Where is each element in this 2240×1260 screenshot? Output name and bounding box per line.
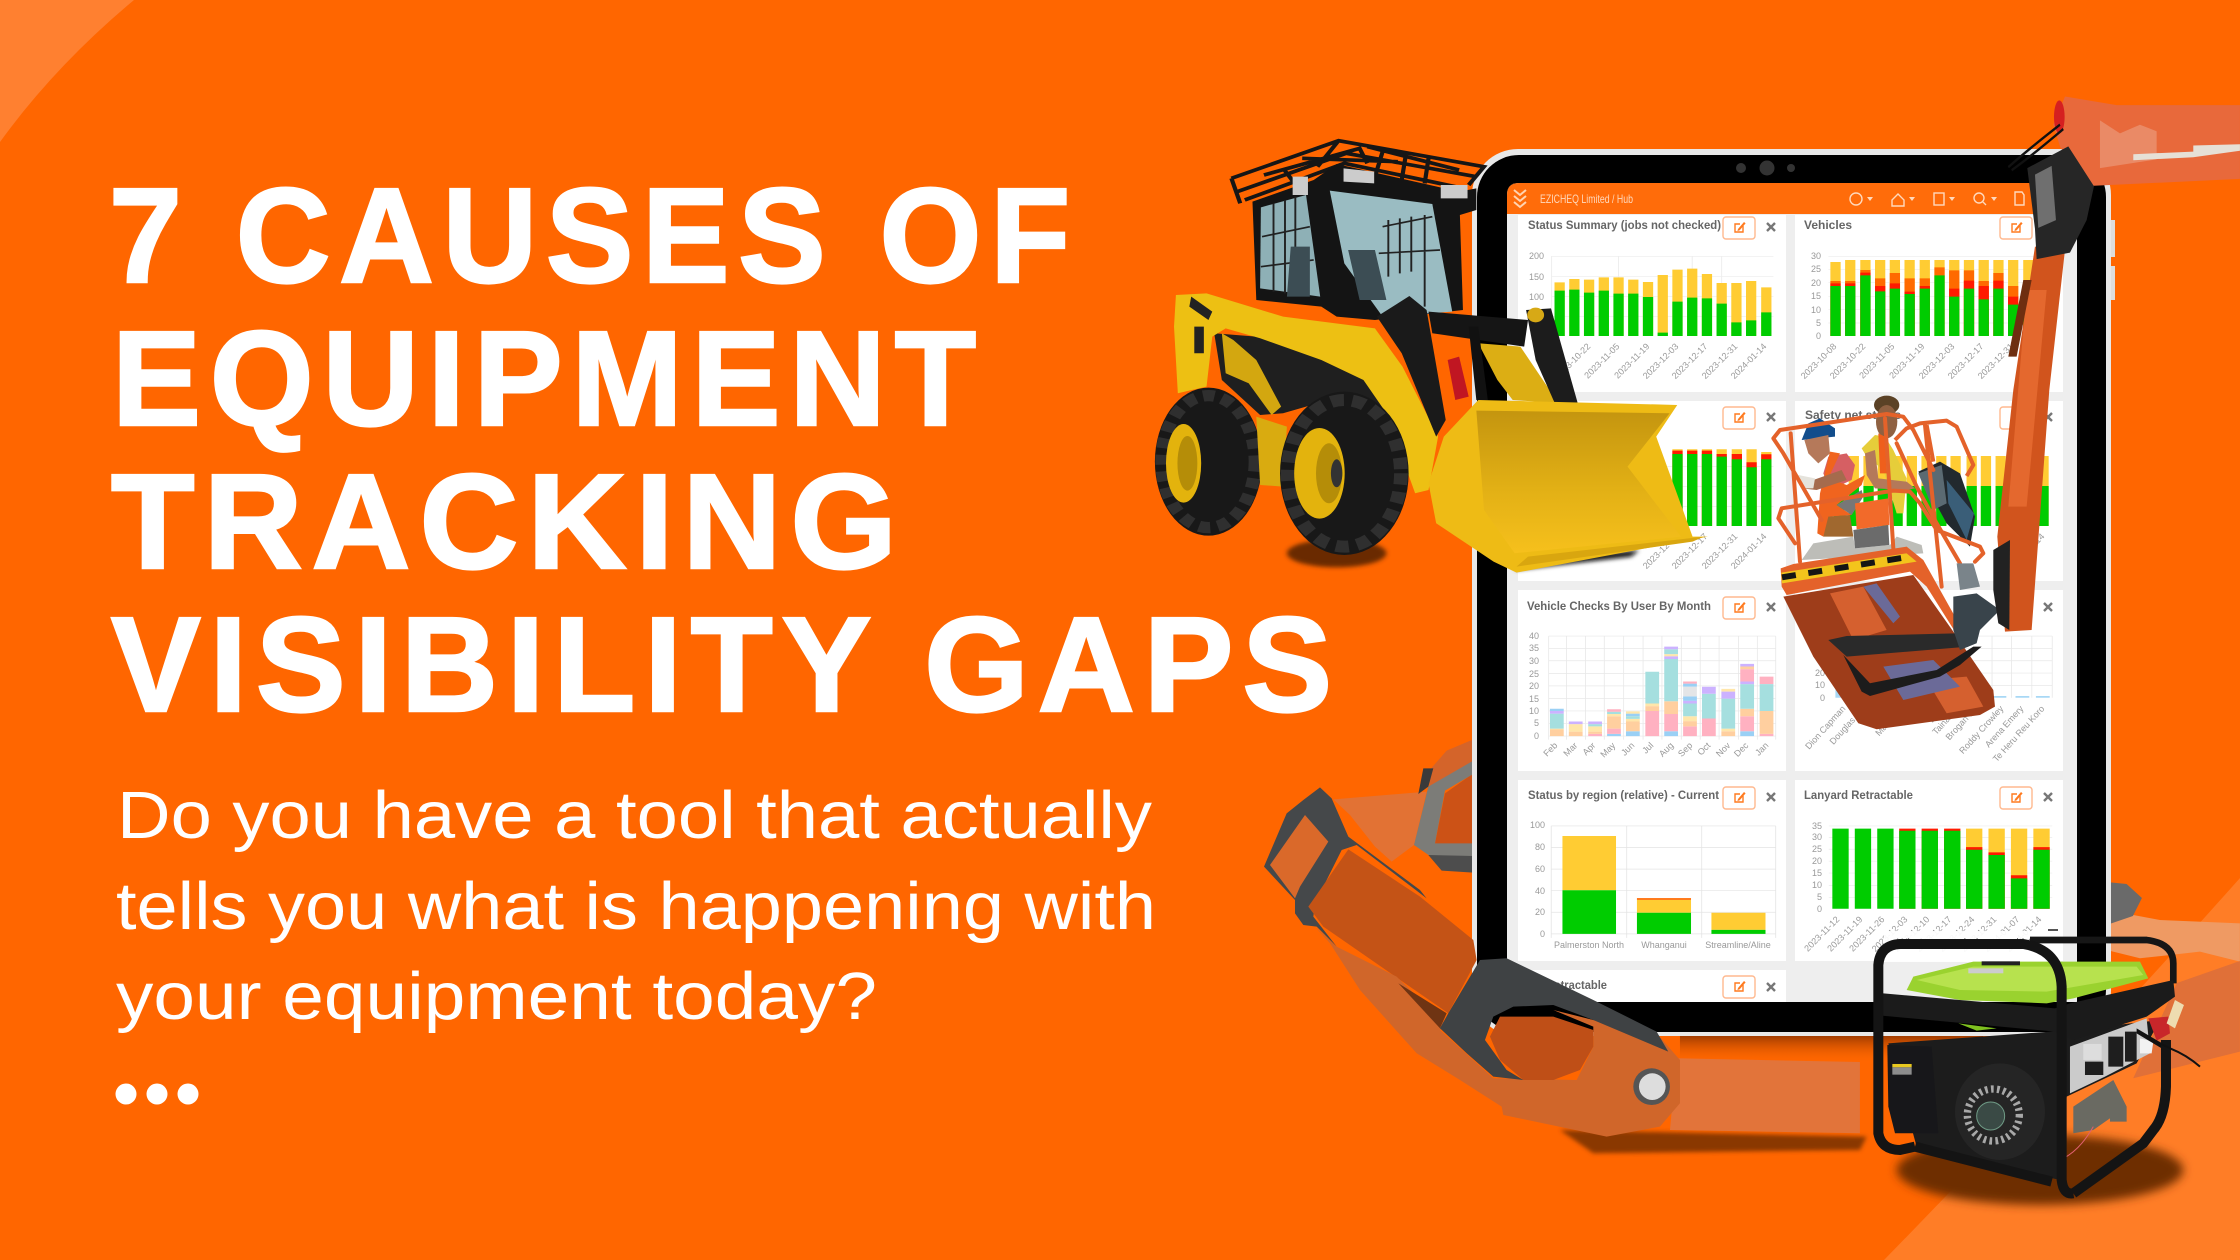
title: 7 CAUSES OF	[109, 160, 1079, 311]
bar chart: status summary: 2023-12-17	[1670, 341, 1709, 381]
tablet cameras	[1736, 160, 1795, 176]
card: status summary: Status Summary (jobs not checked)	[1528, 218, 1721, 232]
bar chart: checks by user: Roddy Crowley	[1957, 703, 2006, 756]
orange housing	[1315, 927, 1680, 1137]
generator shadow	[1897, 1135, 2183, 1205]
stacked bar chart: vehicle checks: Jul	[1640, 740, 1655, 756]
bar chart: status by region: 80	[1535, 842, 1545, 852]
basket tub	[1802, 537, 1923, 560]
green fuel tank	[1907, 961, 2148, 1003]
ground shadow	[1287, 539, 1386, 567]
bucket	[1429, 400, 1708, 573]
lift basket with workers	[1773, 396, 2010, 729]
cab	[1252, 164, 1476, 320]
card: checks by user	[1795, 590, 2063, 771]
rear wheel	[1155, 388, 1262, 536]
bar chart: row two left	[1641, 449, 1773, 571]
right webbing	[2133, 961, 2240, 1078]
bar chart: checks by user: Kel	[1910, 704, 1926, 720]
bar chart: lanyard retractable: 0	[1817, 904, 1822, 914]
bar chart: safety net	[1839, 456, 2046, 571]
ellipsis dots	[116, 1084, 198, 1104]
lower engine parts	[2073, 1080, 2127, 1133]
bar chart: status summary: 200	[1529, 251, 1544, 261]
worker with blue helmet	[1798, 418, 1865, 537]
inner webbing	[1490, 1017, 1593, 1080]
bar chart: status summary: 2023-11-05	[1582, 341, 1621, 380]
stacked bar chart: vehicle checks: 30	[1529, 656, 1539, 666]
housing gusset	[1398, 983, 1447, 1028]
bar chart: checks by user: Dion Capman	[1803, 704, 1847, 751]
recoil starter	[1955, 1063, 2045, 1160]
bar chart: status by region: Streamline/Aline	[1705, 940, 1771, 950]
roof rack	[1231, 141, 1484, 203]
bar chart: status summary: 2023-12-03	[1641, 341, 1680, 381]
tablet drop shadow	[1680, 1036, 1983, 1063]
bar chart: lanyard retractable: 2024-01-07	[1982, 914, 2021, 954]
basket panel	[1853, 498, 1889, 548]
battery box	[1887, 1045, 1938, 1133]
green tank sliver	[1958, 1023, 1997, 1031]
bar chart: row two left: 2023-12-03	[1641, 531, 1680, 571]
title: EQUIPMENT	[112, 303, 985, 454]
bar chart: checks by user: 20	[1815, 668, 1825, 678]
stacked bar chart: vehicle checks: Feb	[1541, 740, 1559, 758]
stacked bar chart: vehicle checks	[1529, 631, 1776, 759]
stacked bar chart: vehicle checks: 10	[1529, 706, 1539, 716]
subtitle: Do you have a tool that actually	[117, 778, 1153, 853]
bar chart: status summary: 2023-10-22	[1553, 341, 1592, 381]
subtitle	[116, 778, 1156, 1034]
body yellow	[1174, 293, 1438, 493]
rear rails	[1895, 421, 1973, 476]
stacked bar chart: vehicle checks: 5	[1534, 718, 1539, 728]
card: status summary	[1518, 215, 1786, 392]
stacked bar chart: vehicle checks: 20	[1529, 681, 1539, 691]
boom joint	[2027, 146, 2094, 259]
black clip	[1440, 958, 1668, 1080]
tablet bezel	[1472, 149, 2111, 1036]
title: TRACKING	[111, 446, 906, 597]
front rails	[1773, 414, 1983, 587]
basket floor	[1783, 575, 1995, 729]
basket bracket	[1828, 633, 1982, 696]
stacked bar chart: vehicle checks: Oct	[1695, 740, 1713, 757]
background accent: top-left curve	[0, 0, 134, 142]
bar chart: vehicles: 20	[1811, 278, 1821, 288]
bar chart: vehicles: 25	[1811, 264, 1821, 274]
card: row two left chart	[1518, 401, 1786, 581]
bar chart: vehicles: 0	[1816, 331, 1821, 341]
bar chart: vehicles: 2023-11-19	[1887, 341, 1926, 380]
bar chart: checks by user: Manukau	[1873, 704, 1905, 738]
card: vehicle checks by user by month: Vehicle Checks By User By Month	[1527, 599, 1711, 613]
bar chart: lanyard retractable: 2023-11-26	[1847, 914, 1886, 953]
bar chart: status summary	[1529, 251, 1773, 381]
bar chart: lanyard retractable: 2023-11-12	[1802, 914, 1841, 953]
safety strap: front section	[1264, 787, 2240, 1153]
portable generator	[1875, 940, 2200, 1205]
tablet screen	[1507, 183, 2077, 1002]
engine block	[1888, 1020, 2160, 1180]
bar chart: lanyard retractable: 10	[1812, 880, 1822, 890]
frame deck	[1875, 980, 2175, 1040]
bar chart: vehicles: 2023-12-31	[1976, 341, 2015, 381]
bucket shadow	[1513, 550, 1639, 570]
bar chart: checks by user: Taina Ha	[1930, 704, 1961, 737]
bar chart: checks by user: Brogan Hy	[1944, 703, 1980, 742]
bar chart: row two left: 2023-12-31	[1700, 531, 1739, 571]
bar chart: status summary: 2023-12-31	[1700, 341, 1739, 381]
bar chart: status by region: 100	[1530, 820, 1545, 830]
background accent: bottom-right diagonal	[1884, 878, 2240, 1260]
strap shadow	[1560, 1130, 1867, 1153]
bar chart: checks by user: 0	[1820, 693, 1825, 703]
control panel	[2070, 1000, 2184, 1093]
skid steer loader	[1155, 141, 1708, 573]
front frame	[1878, 944, 2166, 1193]
bar chart: checks by user: 10	[1815, 680, 1825, 690]
bar chart: vehicles: 2023-12-03	[1917, 341, 1956, 381]
bar chart: lanyard retractable: 25	[1812, 844, 1822, 854]
bar chart: vehicles: 2023-11-05	[1857, 341, 1896, 380]
tablet	[1472, 149, 2115, 1036]
bar chart: vehicles: 2023-12-17	[1946, 341, 1985, 381]
stacked bar chart: vehicle checks: 15	[1529, 694, 1539, 704]
card: lanyard retractable: Lanyard Retractable	[1804, 788, 1913, 802]
horizontal boom	[2008, 97, 2240, 259]
front wheel	[1280, 392, 1409, 555]
strap left buckle	[1264, 787, 1427, 947]
subtitle: your equipment today?	[116, 959, 877, 1034]
title	[109, 160, 1341, 740]
bar chart: lanyard retractable: 2023-11-19	[1825, 914, 1864, 953]
stacked bar chart: vehicle checks: Sep	[1676, 740, 1694, 759]
bar chart: lanyard retractable: 5	[1817, 892, 1822, 902]
safety strap: rear section behind tablet	[1333, 739, 2240, 962]
stacked bar chart: vehicle checks: 40	[1529, 631, 1539, 641]
card: vehicles	[1795, 215, 2063, 392]
bar chart: checks by user: Brett	[1926, 703, 1947, 724]
vertical boom	[1997, 247, 2065, 632]
bar chart: lanyard retractable: 20	[1812, 856, 1822, 866]
bar chart: status by region: 60	[1535, 864, 1545, 874]
bar chart: lanyard retractable: 2023-12-31	[1959, 914, 1998, 954]
bar chart: row two left: 2023-12-17	[1670, 531, 1709, 571]
bar chart: checks by user: Te Heru Reu Koro	[1991, 704, 2046, 764]
stacked bar chart: vehicle checks: May	[1598, 740, 1618, 759]
bar chart: status by region: Palmerston North	[1554, 940, 1624, 950]
chat widget	[1884, 920, 2063, 962]
bar chart: vehicles: 15	[1811, 291, 1821, 301]
subtitle: tells you what is happening with	[116, 869, 1156, 944]
bar chart: safety net: 2024-01-14	[2007, 531, 2046, 571]
card: status by region	[1518, 780, 1786, 961]
card: retractable (cropped)	[1500, 970, 1786, 1002]
bar chart: vehicles: 10	[1811, 305, 1821, 315]
lift arms	[1377, 296, 1578, 437]
control box	[1918, 462, 1975, 547]
rear frame	[2030, 940, 2173, 983]
hinge and junction box	[1953, 540, 2010, 650]
bar chart: status by region	[1530, 820, 1776, 950]
main webbing	[1308, 849, 1477, 1013]
stacked bar chart: vehicle checks: 35	[1529, 643, 1539, 653]
stacked bar chart: vehicle checks: Jan	[1753, 740, 1770, 758]
bar chart: lanyard retractable: 2023-12-10	[1892, 914, 1931, 954]
bar chart: lanyard retractable: 2024-01-14	[2004, 914, 2043, 954]
bar chart: row two left: 2024-01-14	[1729, 531, 1768, 571]
body dark interior	[1214, 333, 1394, 415]
app header bar	[1507, 183, 2077, 214]
bar chart: status by region: Whanganui	[1641, 940, 1687, 950]
pink wire	[2063, 1127, 2093, 1158]
bar chart: vehicles: 2023-10-08	[1799, 341, 1838, 381]
card: retractable (cropped): Lanyard Retractable	[1500, 978, 1607, 992]
stacked bar chart: vehicle checks: Apr	[1580, 740, 1597, 757]
app header bar: EZICHEQ Limited / Hub	[1540, 192, 1633, 206]
bar chart: status summary: 2023-11-19	[1612, 341, 1651, 380]
rivet	[1633, 1068, 1670, 1105]
horizontal webbing	[1670, 1058, 1860, 1133]
card: lanyard retractable	[1795, 780, 2063, 961]
stacked bar chart: vehicle checks: 0	[1534, 731, 1539, 741]
bar chart: status by region: 0	[1540, 929, 1545, 939]
card: safety net: Safety net status	[1805, 408, 1901, 422]
bar chart: lanyard retractable	[1802, 821, 2052, 954]
bar chart: vehicles: 30	[1811, 251, 1821, 261]
bar chart: lanyard retractable: 2023-12-03	[1870, 914, 1909, 954]
bar chart: checks by user: Douglas Pol	[1828, 704, 1867, 746]
left webbing	[1270, 815, 1328, 898]
bar chart: lanyard retractable: 2023-12-17	[1914, 914, 1953, 954]
bar chart: lanyard retractable: 15	[1812, 868, 1822, 878]
bar chart: checks by user: Arena Emery	[1983, 703, 2026, 749]
bar chart: vehicles: 5	[1816, 318, 1821, 328]
bar chart: lanyard retractable: 2023-12-24	[1937, 914, 1976, 954]
tablet side buttons	[2111, 220, 2115, 300]
power cable	[2153, 1040, 2200, 1067]
right rear strap section	[2107, 915, 2240, 962]
stacked bar chart: vehicle checks: 25	[1529, 669, 1539, 679]
stacked bar chart: vehicle checks: Jun	[1619, 740, 1636, 758]
right strap grey knob	[2107, 882, 2142, 925]
stacked bar chart: vehicle checks: Nov	[1714, 740, 1733, 759]
bar chart: status summary: 2024-01-14	[1729, 341, 1768, 381]
stacked bar chart: vehicle checks: Mar	[1561, 740, 1579, 758]
card: status by region: Status by region (relative) - Current	[1528, 788, 1719, 802]
bar chart: status summary: 100	[1529, 292, 1544, 302]
bar chart: status summary: 150	[1529, 272, 1544, 282]
stacked bar chart: vehicle checks: Dec	[1732, 740, 1751, 759]
basket rim with hazard stripe	[1781, 547, 1955, 632]
title: VISIBILITY GAPS	[111, 589, 1341, 740]
card: safety net	[1795, 401, 2063, 581]
bar chart: lanyard retractable: 35	[1812, 821, 1822, 831]
worker with yellow shirt	[1862, 396, 1915, 513]
bar chart: vehicles	[1799, 251, 2049, 381]
bar chart: checks by user	[1803, 636, 2052, 764]
bar chart: status by region: 40	[1535, 886, 1545, 896]
stacked bar chart: vehicle checks: Aug	[1657, 740, 1675, 759]
bar chart: status by region: 20	[1535, 907, 1545, 917]
card: vehicles: Vehicles	[1804, 218, 1852, 232]
bar chart: lanyard retractable: 30	[1812, 832, 1822, 842]
card: vehicle checks by user by month	[1518, 590, 1786, 771]
chat widget: What can we help you with?	[1897, 937, 2034, 949]
aerial lift boom	[1997, 97, 2240, 632]
bar chart: vehicles: 2023-10-22	[1828, 341, 1867, 381]
